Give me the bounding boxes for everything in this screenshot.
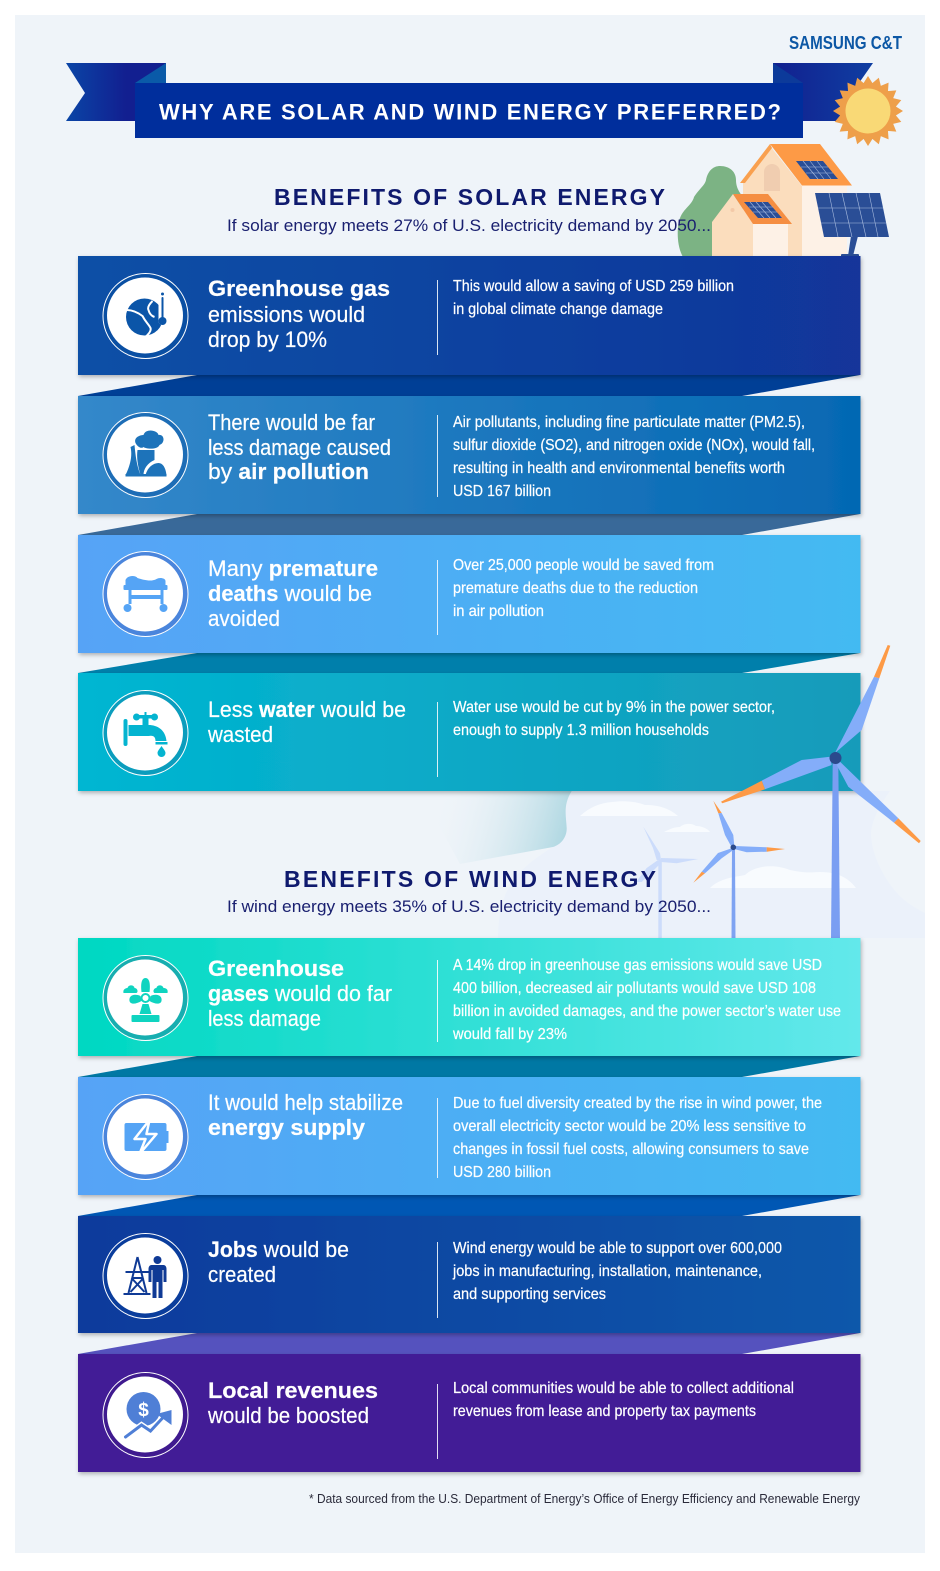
heading: avoided (208, 606, 280, 631)
icon: hospital bed (103, 552, 188, 636)
heading: benefits of wind energy: BENEFITS OF WIND ENERGY (284, 866, 656, 892)
icon: dollar coin and rising arrow: $ (138, 1400, 149, 1421)
title ribbon (66, 63, 873, 138)
body text: in global climate change damage (453, 301, 663, 318)
heading: Many premature (208, 556, 378, 581)
icon: dollar coin and rising arrow (103, 1372, 188, 1458)
panel: greenhouse gases (wind) (78, 938, 860, 1056)
body text (453, 557, 714, 620)
panel: greenhouse gas (78, 256, 860, 375)
icon: power plant smoke (103, 412, 188, 498)
heading: Jobs would be (208, 1237, 349, 1262)
body text: sulfur dioxide (SO2), and nitrogen oxide (NOx), would fall, (453, 437, 815, 454)
body text: This would allow a saving of USD 259 billion (453, 278, 734, 295)
body text: USD 280 billion (453, 1164, 551, 1181)
body text: premature deaths due to the reduction (453, 580, 698, 597)
heading (207, 697, 406, 747)
body text (453, 1095, 822, 1181)
body text: A 14% drop in greenhouse gas emissions would save USD (453, 957, 822, 974)
heading: energy supply (208, 1115, 366, 1140)
body text: resulting in health and environmental benefits worth (453, 460, 785, 477)
heading: deaths would be (208, 581, 372, 606)
heading: There would be far (208, 410, 375, 435)
wind backdrop (420, 791, 925, 938)
heading: It would help stabilize (208, 1090, 403, 1115)
heading: Greenhouse (208, 956, 344, 981)
body text: Due to fuel diversity created by the rise in wind power, the (453, 1095, 822, 1112)
body text: Over 25,000 people would be saved from (453, 557, 714, 574)
small turbine (636, 827, 698, 939)
heading: emissions would (208, 302, 365, 327)
body text: jobs in manufacturing, installation, maintenance, (452, 1263, 762, 1280)
body text: Air pollutants, including fine particulate matter (PM2.5), (453, 414, 805, 431)
body text (453, 1380, 794, 1420)
title text: WHY ARE SOLAR AND WIND ENERGY PREFERRED? (159, 100, 781, 124)
body text: revenues from lease and property tax payments (453, 1403, 756, 1420)
heading (208, 556, 378, 631)
heading: drop by 10% (208, 327, 327, 352)
heading (208, 276, 390, 352)
connectors between solar cards (78, 375, 860, 673)
body text: Wind energy would be able to support over 600,000 (453, 1240, 782, 1257)
icon: battery with lightning (103, 1094, 188, 1180)
subheading: wind: If wind energy meets 35% of U.S. electricity demand by 2050... (227, 897, 711, 916)
body text (452, 1240, 782, 1303)
body text: USD 167 billion (453, 483, 551, 500)
heading (208, 410, 391, 484)
logo: Samsung C&T: SAMSUNG C&T (789, 33, 902, 53)
icon: windmill and clouds (103, 956, 188, 1040)
icon: water tap (103, 690, 188, 776)
body text (453, 699, 775, 739)
body text: overall electricity sector would be 20% less sensitive to (453, 1118, 806, 1135)
body text: would fall by 23% (452, 1026, 567, 1043)
icon: sun (833, 76, 903, 146)
heading: created (208, 1262, 276, 1287)
panel: less water (78, 673, 860, 791)
panel: air pollution (78, 396, 860, 514)
heading (208, 1237, 349, 1287)
icon: globe and thermometer (103, 274, 188, 358)
heading: Local revenues (208, 1378, 378, 1403)
icon: pylon and worker (103, 1234, 188, 1318)
body text: changes in fossil fuel costs, allowing consumers to save (453, 1141, 809, 1158)
panel: local revenues (78, 1354, 860, 1472)
heading: by air pollution (208, 459, 369, 484)
heading (208, 956, 392, 1031)
heading (208, 1090, 403, 1140)
connectors between wind cards (78, 1056, 860, 1354)
heading: Less water would be (208, 697, 406, 722)
large turbine (721, 645, 921, 939)
body text: Local communities would be able to collect additional (453, 1380, 794, 1397)
heading: Greenhouse gas (208, 276, 390, 301)
heading: less damage caused (208, 435, 391, 460)
illustration: houses with solar panels (678, 144, 889, 258)
clouds (580, 801, 856, 888)
body text: 400 billion, decreased air pollutants would save USD 108 (453, 980, 816, 997)
panel: energy supply (78, 1077, 860, 1195)
panel: premature deaths (78, 535, 860, 653)
panel: jobs (78, 1216, 860, 1333)
footnote: * Data sourced from the U.S. Department of Energy’s Office of Energy Efficiency and Renewable Energy (309, 1491, 860, 1506)
heading: less damage (208, 1006, 321, 1031)
body text: Water use would be cut by 9% in the power sector, (453, 699, 775, 716)
heading: would be boosted (207, 1403, 369, 1428)
medium turbine (693, 801, 785, 939)
body text (453, 414, 815, 500)
heading: wasted (207, 722, 273, 747)
heading: gases would do far (208, 981, 392, 1006)
body text (453, 278, 734, 318)
subheading: solar: If solar energy meets 27% of U.S. electricity demand by 2050... (227, 216, 711, 235)
body text: in air pollution (453, 603, 544, 620)
body text (452, 957, 841, 1043)
wind turbines (636, 645, 921, 939)
body text: billion in avoided damages, and the power sector’s water use (453, 1003, 841, 1020)
body text: and supporting services (453, 1286, 606, 1303)
heading (207, 1378, 378, 1428)
heading: benefits of solar energy: BENEFITS OF SOLAR ENERGY (274, 184, 665, 210)
body text: enough to supply 1.3 million households (453, 722, 709, 739)
